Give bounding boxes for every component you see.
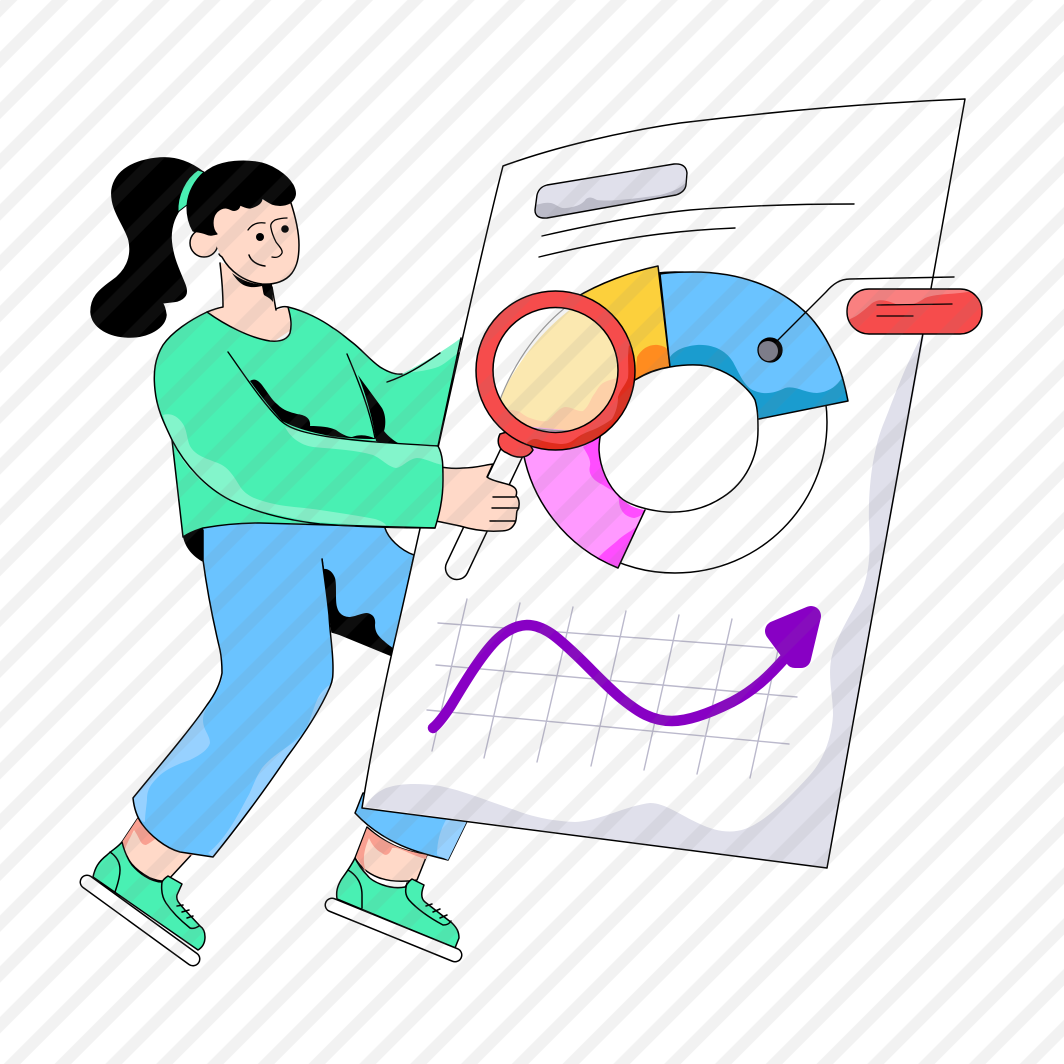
- magnifier: [475, 290, 636, 458]
- magnifier ring: [476, 291, 635, 450]
- heading text lines: [539, 204, 854, 257]
- face: [213, 200, 299, 284]
- callout dot: [758, 338, 782, 362]
- callout label pill: [847, 285, 985, 334]
- document sheet: [362, 99, 965, 868]
- pants: right leg: [355, 793, 470, 860]
- shoe: right: [332, 858, 459, 955]
- donut base ring: [523, 272, 827, 573]
- segment: yellow: [575, 266, 670, 380]
- ponytail: [91, 158, 203, 337]
- back shadow under shirt: [183, 526, 205, 563]
- segment: pink: [522, 437, 645, 568]
- sleeve fold shadows: [250, 380, 376, 439]
- sweater: [154, 307, 461, 537]
- sweater highlights: [163, 414, 387, 527]
- magnifier handle: [457, 452, 512, 568]
- hair band: [178, 170, 204, 212]
- sheet shadow: [365, 330, 925, 868]
- ankle: left: [122, 818, 193, 881]
- ankle: right: [355, 827, 427, 881]
- pants: raised thigh: [203, 515, 414, 657]
- donut hole: [599, 365, 758, 512]
- neck: [207, 262, 291, 342]
- shoe: left: [87, 842, 205, 959]
- callout connector: [778, 277, 954, 340]
- magnifier neck: [498, 428, 533, 457]
- segment: blue: [660, 272, 848, 419]
- title placeholder bar: [534, 163, 688, 219]
- hand: [430, 464, 519, 531]
- trend arrow: [433, 616, 811, 728]
- magnified lens: [494, 308, 618, 432]
- donut chart: [522, 266, 848, 573]
- pants: front leg: [133, 515, 333, 857]
- line chart grid: [427, 599, 797, 778]
- sweater outline and folds: [154, 307, 461, 537]
- ear: [190, 229, 218, 257]
- hair: [187, 161, 295, 235]
